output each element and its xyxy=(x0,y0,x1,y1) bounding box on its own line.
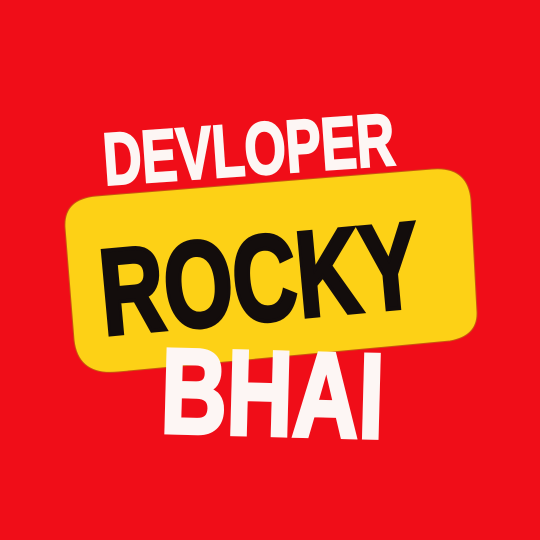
heading: DEVLOPER: DEVLOPER xyxy=(100,98,397,201)
yellow rounded banner xyxy=(65,169,477,372)
heading: BHAI: BHAI xyxy=(159,324,386,464)
heading: ROCKY: ROCKY xyxy=(94,196,425,361)
